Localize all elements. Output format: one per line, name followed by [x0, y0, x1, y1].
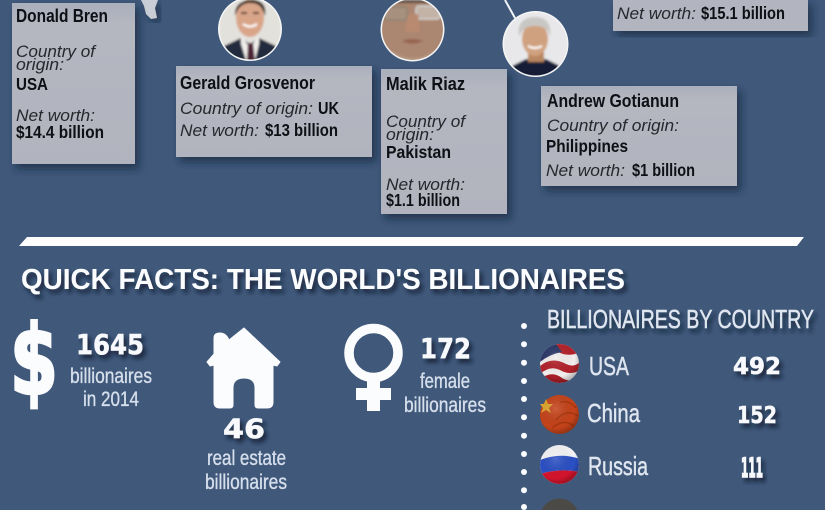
net worth: $1 billion — [632, 160, 695, 180]
net worth: Net worth: — [386, 176, 465, 194]
name: Malik Riaz — [386, 74, 465, 94]
connector line — [505, 0, 515, 18]
icon: USA flag — [540, 344, 580, 384]
country of origin: Country of — [386, 113, 468, 131]
country of origin: Country of origin: — [547, 117, 679, 135]
panel: Donald Bren — [12, 3, 135, 164]
caption: female — [420, 370, 470, 393]
country of origin: Philippines — [546, 136, 628, 156]
net worth: Net worth: — [546, 162, 625, 180]
heading: QUICK FACTS: THE WORLD'S BILLIONAIRES — [21, 264, 625, 296]
panel: Andrew Gotianun — [541, 86, 737, 186]
number: 172 — [420, 332, 471, 365]
panel: Malik Riaz — [381, 69, 507, 214]
caption: billionaires — [70, 365, 152, 388]
portrait: Gerald Grosvenor — [218, 0, 282, 61]
name: Donald Bren — [16, 6, 108, 26]
net worth: Net worth: — [617, 5, 696, 23]
panel: top right card — [613, 0, 808, 31]
value: 492 — [733, 354, 781, 380]
name: Andrew Gotianun — [547, 91, 679, 111]
net worth: $15.1 billion — [701, 3, 785, 23]
icon: China flag — [540, 395, 579, 434]
caption: billionaires — [205, 471, 287, 494]
caption: in 2014 — [83, 388, 139, 411]
panel: billionaires by country: 111 — [741, 453, 763, 484]
country of origin: Country of — [16, 43, 98, 61]
net worth: $14.4 billion — [16, 122, 104, 142]
net worth — [180, 120, 338, 140]
row: USA — [540, 344, 781, 384]
net worth: $1.1 billion — [386, 190, 460, 210]
net worth — [546, 160, 695, 180]
portrait: Malik Riaz — [380, 0, 444, 62]
icon: fourth country flag — [542, 498, 577, 510]
number: 1645 — [76, 328, 144, 361]
icon: Russia flag — [540, 445, 580, 485]
country of origin: origin: — [16, 56, 64, 74]
dotted separator — [521, 323, 527, 510]
country of origin: origin: — [386, 126, 434, 144]
map fragment — [141, 0, 158, 19]
country of origin — [546, 117, 679, 156]
net worth: Net worth: — [180, 122, 259, 140]
country of origin: UK — [318, 98, 339, 118]
country of origin: USA — [16, 74, 48, 94]
caption — [205, 447, 287, 494]
icon: female symbol — [349, 328, 398, 411]
name: Gerald Grosvenor — [180, 73, 315, 93]
row: Russia — [540, 445, 763, 485]
caption: real estate — [207, 447, 286, 470]
label: Russia — [588, 451, 648, 481]
row: China — [540, 395, 777, 434]
net worth — [617, 3, 785, 23]
stat: 1645 billionaires — [10, 305, 152, 417]
country of origin: Pakistan — [386, 142, 451, 162]
value: 152 — [737, 403, 777, 429]
divider bar — [19, 237, 804, 246]
country of origin — [16, 43, 98, 94]
icon: house — [207, 328, 280, 408]
panel: Gerald Grosvenor — [176, 66, 372, 157]
caption: billionaires — [404, 394, 486, 417]
net worth: $13 billion — [265, 120, 338, 140]
caption — [70, 365, 152, 411]
country of origin: Country of origin: — [180, 100, 313, 118]
panel: billionaires by country — [540, 304, 814, 510]
stat: 46 real estate billionaires — [205, 328, 287, 494]
net worth — [16, 107, 104, 142]
icon: dollar sign: $ — [10, 305, 58, 417]
portrait: Andrew Gotianun — [502, 11, 569, 77]
label: China — [587, 398, 640, 428]
stat: 172 female billionaires — [349, 328, 486, 417]
net worth — [386, 176, 465, 210]
number: 46 — [223, 414, 265, 445]
net worth: Net worth: — [16, 107, 95, 125]
country of origin — [386, 113, 468, 162]
label: USA — [589, 351, 629, 381]
caption — [404, 370, 486, 417]
